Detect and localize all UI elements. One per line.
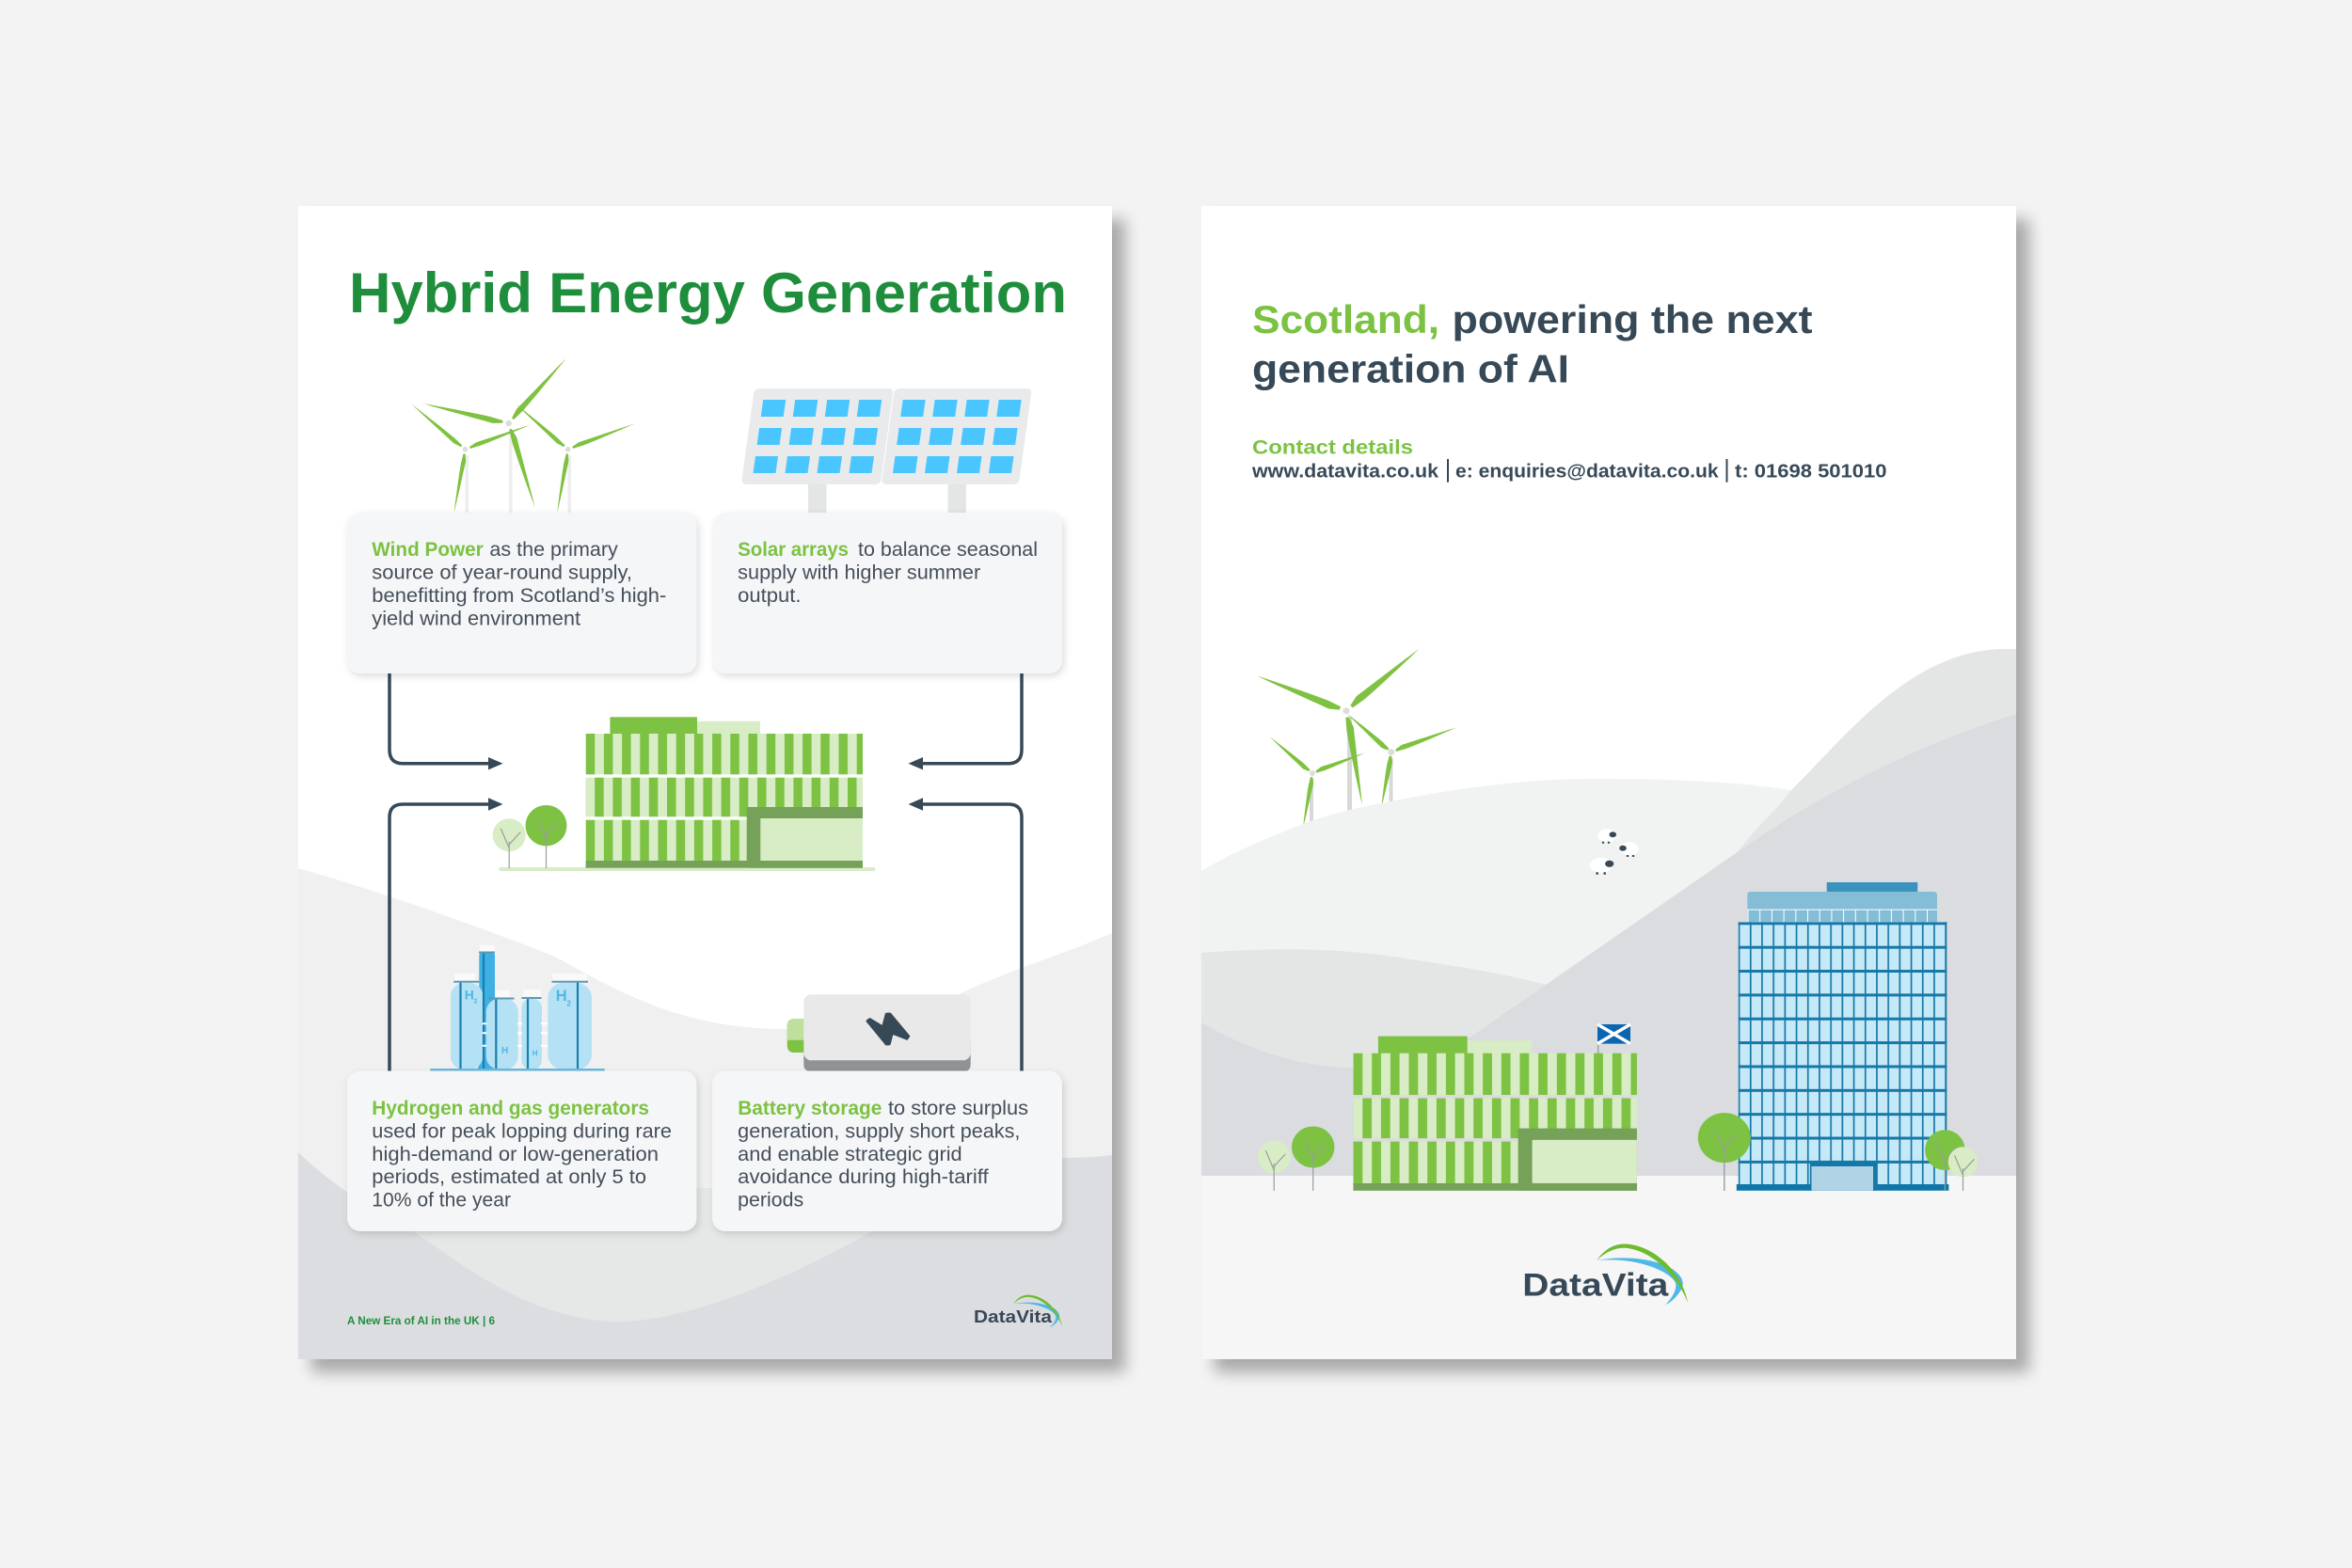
contact details: t: 01698 501010 — [1735, 462, 1887, 483]
icon: hydrogen tanks: H — [532, 1050, 538, 1058]
icon: trees — [1258, 1113, 1978, 1191]
arrow: battery to data centre — [909, 798, 1022, 1072]
panel: wind power card: benefitting from Scotland’s high- — [372, 585, 666, 607]
panel: battery storage card: to store surplus — [888, 1098, 1028, 1119]
panel: hydrogen and gas generators card: high-demand or low-generation — [372, 1144, 659, 1165]
panel: wind power card — [347, 513, 696, 673]
icon: hydrogen tanks: H — [556, 988, 567, 1005]
panel: solar arrays card: to balance seasonal — [858, 539, 1038, 561]
panel: solar arrays card: output. — [738, 585, 802, 607]
panel: hydrogen and gas generators card: periods, estimated at only 5 to — [372, 1166, 646, 1188]
heading: Scotland, powering the next generation of AI: generation of AI — [1252, 347, 1569, 391]
panel: solar arrays card: Solar arrays — [738, 539, 849, 561]
contact details: Contact details — [1252, 437, 1413, 459]
icon: hydrogen tanks: 2 — [566, 999, 572, 1008]
contact details — [1251, 437, 1887, 483]
panel: left page Hybrid Energy Generation — [298, 206, 1125, 1372]
arrow: hydrogen to data centre — [389, 798, 502, 1072]
contact details: www.datavita.co.uk — [1251, 462, 1439, 483]
panel: battery storage card: and enable strategic grid — [738, 1144, 962, 1165]
heading: Scotland, powering the next generation of AI: powering the next — [1453, 297, 1813, 341]
logo: DataVita small — [974, 1295, 1062, 1327]
panel: solar arrays card — [713, 513, 1062, 673]
contact details: e: enquiries@datavita.co.uk — [1455, 462, 1720, 483]
icon: green data centre building — [1353, 1037, 1637, 1191]
heading: Scotland, powering the next generation of AI — [1252, 297, 1813, 391]
icon: solar panels — [741, 388, 1032, 515]
panel: battery storage card: avoidance during high-tariff — [738, 1166, 989, 1188]
icon: wind turbines — [410, 356, 635, 514]
panel: hydrogen and gas generators card: used for peak lopping during rare — [372, 1120, 672, 1142]
icon: hydrogen tanks: H — [465, 987, 474, 1002]
panel: wind power card: yield wind environment — [372, 608, 580, 630]
panel: battery storage card: periods — [738, 1190, 803, 1212]
icon: green data centre building — [493, 717, 875, 871]
panel: solar arrays card: supply with higher summer — [738, 562, 980, 583]
heading: Scotland, powering the next generation of AI: Scotland, — [1252, 297, 1439, 341]
icon: wind turbines on hill — [1255, 645, 1457, 830]
panel: hydrogen and gas generators card: 10% of the year — [372, 1190, 511, 1212]
footer: page reference: A New Era of AI in the UK | 6 — [347, 1316, 495, 1327]
logo: DataVita small: DataVita — [974, 1307, 1053, 1326]
panel: hydrogen and gas generators card — [347, 1070, 696, 1231]
background hills — [1201, 649, 2016, 1359]
panel: hydrogen and gas generators card: Hydrogen and gas generators — [372, 1098, 649, 1119]
arrow: wind to data centre — [389, 673, 502, 769]
arrow: solar to data centre — [909, 673, 1022, 769]
panel: right page Scotland — [1201, 206, 2029, 1372]
icon: hydrogen tanks — [430, 945, 605, 1071]
icon: blue office tower — [1737, 882, 1948, 1191]
icon: battery — [787, 994, 971, 1071]
panel: wind power card: as the primary — [489, 539, 618, 561]
panel: battery storage card: generation, supply short peaks, — [738, 1120, 1020, 1142]
panel: battery storage card: Battery storage — [738, 1098, 882, 1119]
panel: battery storage card — [712, 1070, 1062, 1231]
icon: hydrogen tanks: 2 — [474, 999, 478, 1005]
logo: DataVita large: DataVita — [1522, 1267, 1670, 1303]
heading: Hybrid Energy Generation: Hybrid Energy Generation — [349, 261, 1067, 325]
icon: hydrogen tanks: H — [501, 1046, 508, 1056]
logo: DataVita large — [1522, 1243, 1688, 1305]
icon: Scottish flag — [1597, 1023, 1630, 1053]
icon: sheep — [1590, 829, 1639, 875]
panel: wind power card: source of year-round supply, — [372, 562, 632, 583]
panel: wind power card: Wind Power — [372, 539, 484, 561]
